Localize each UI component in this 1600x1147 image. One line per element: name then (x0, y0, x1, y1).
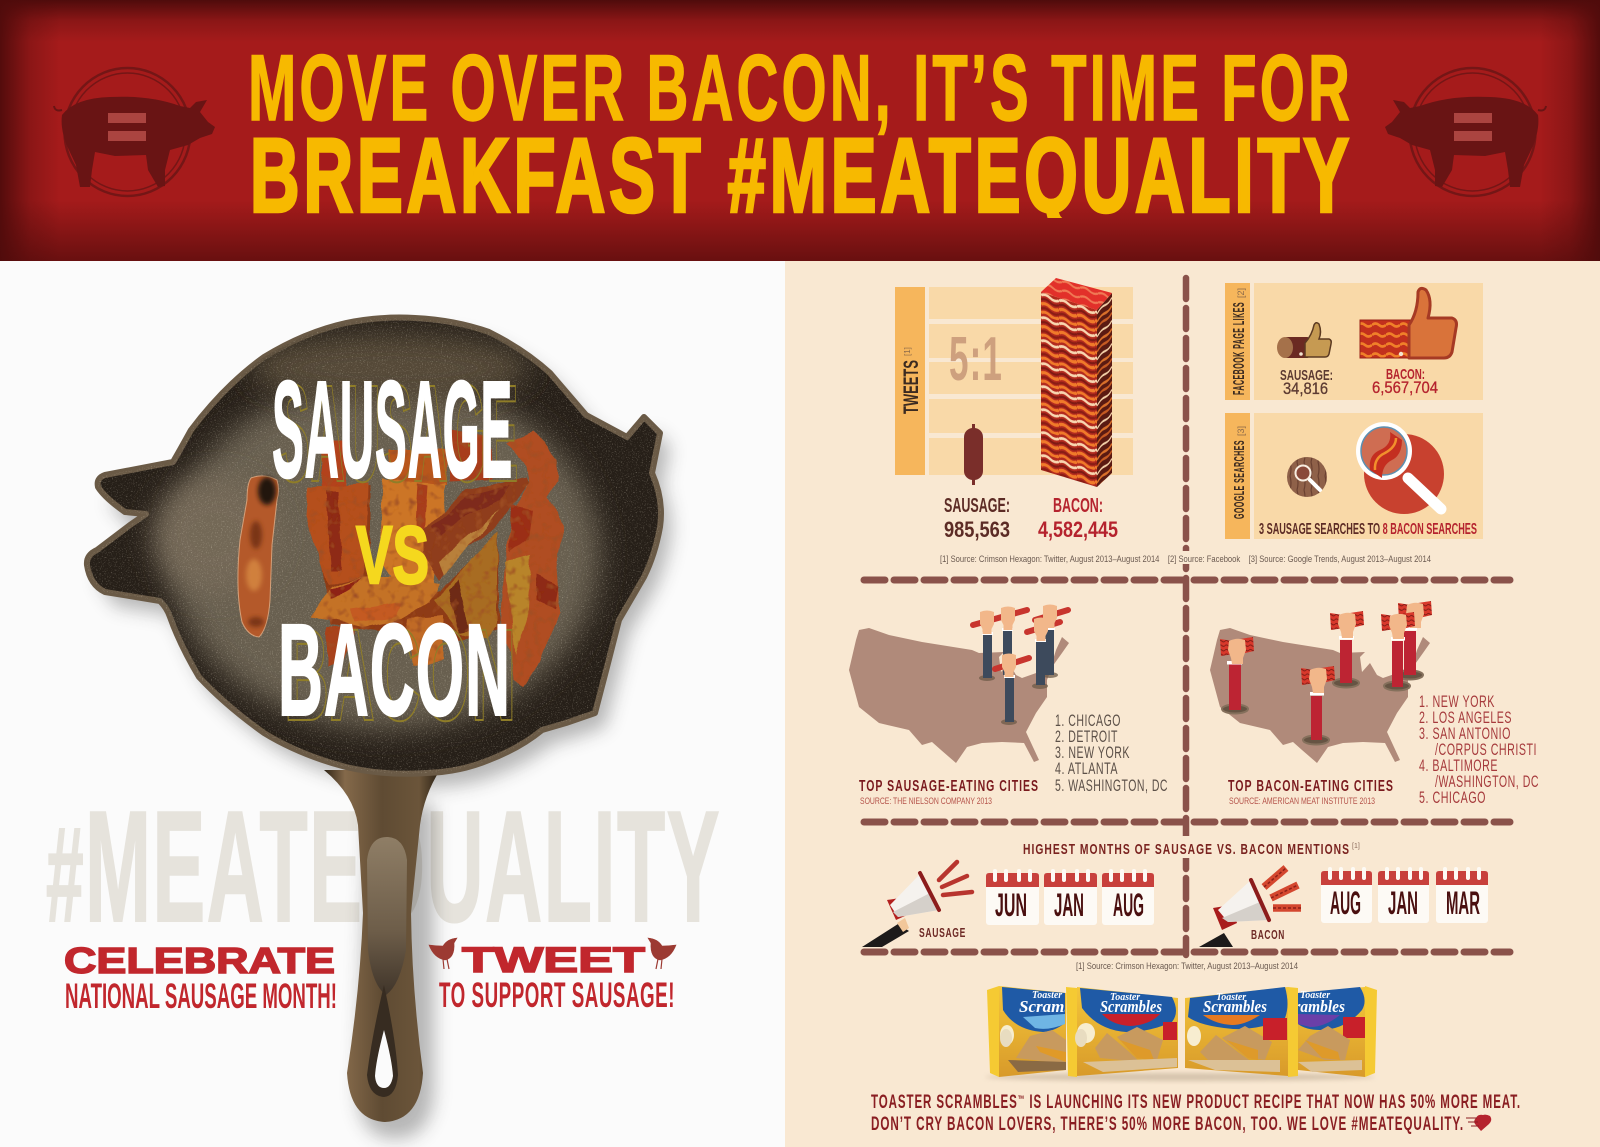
sausage likes: 34,816 (1283, 379, 1328, 398)
calendar: aug: AUG (1330, 885, 1361, 921)
icon: bacon thumb (1360, 288, 1456, 358)
icon: pig right (1385, 68, 1546, 196)
calendar: aug: AUG (1113, 887, 1144, 923)
skillet illustration: SAUSAGE (278, 357, 519, 511)
icon: sausage thumb (1277, 323, 1331, 358)
icon: heart (1466, 1115, 1491, 1131)
city list: 3. NEW YORK (1055, 744, 1130, 762)
skillet illustration: SAUSAGE (272, 353, 513, 507)
callout: celebrate (64, 940, 337, 1016)
searches comparison: 3 SAUSAGE SEARCHES TO 8 BACON SEARCHES (1259, 521, 1477, 538)
label: facebook (1231, 288, 1248, 395)
closing statement (871, 1092, 1521, 1135)
city list: 2. LOS ANGELES (1419, 709, 1512, 727)
watermark hashtag: #MEATEQUALITY (46, 779, 721, 955)
calendar: mar: MAR (1446, 885, 1480, 921)
bacon likes: BACON: (1386, 366, 1425, 383)
skillet illustration (80, 310, 671, 1139)
label: BACON (1251, 927, 1285, 942)
calendar: jan: JAN (1388, 885, 1418, 921)
label: google: [3] (1236, 426, 1246, 436)
box 1: Scrambles (1019, 997, 1092, 1016)
source note: [1] Source: Crimson Hexagon: Twitter, August 2013–August 2014 (1076, 961, 1298, 972)
city list: 4. ATLANTA (1055, 760, 1118, 778)
map: usa (1210, 628, 1430, 763)
bacon tweet count: 4,582,445 (1038, 517, 1118, 542)
closing statement: TOASTER SCRAMBLES (871, 1092, 1113, 1113)
closing statement: ™ (1018, 1094, 1025, 1106)
calendar: jan: JAN (1054, 887, 1084, 923)
box 4: Toaster (1300, 990, 1330, 1001)
heading: bacon (278, 596, 517, 748)
caption: SOURCE: THE NIELSON COMPANY 2013 (860, 796, 992, 807)
label: google (1231, 426, 1248, 519)
title (251, 54, 1350, 218)
caption: TOP SAUSAGE-EATING CITIES (859, 778, 1039, 795)
sausage link (238, 476, 278, 637)
skillet illustration: BACON (278, 596, 511, 743)
sausage tweet count: 985,563 (944, 517, 1010, 542)
ratio: 5:1 (949, 325, 1003, 394)
heading: sausage (272, 353, 519, 511)
calendar: jan (1378, 869, 1429, 923)
city list: 2. DETROIT (1055, 728, 1118, 746)
calendar: aug (1321, 869, 1372, 923)
panel: top sausage cities (849, 604, 1168, 807)
pan handle (324, 770, 440, 1122)
box 4: Scrambles (1279, 997, 1345, 1016)
calendar: jan (1044, 871, 1097, 925)
caption (859, 778, 1039, 807)
chart background bands (929, 287, 1133, 475)
icon: megaphone sausage (862, 862, 972, 947)
calendar: mar (1436, 869, 1488, 923)
icon: small magnifier (1287, 457, 1327, 497)
box 3: Scrambles (1203, 997, 1267, 1016)
sausage likes: SAUSAGE: (1280, 367, 1333, 384)
sausage tweet count (944, 495, 1010, 542)
label: facebook: [2] (1236, 288, 1246, 298)
box 4 (1298, 986, 1377, 1077)
city list: 5. CHICAGO (1419, 789, 1486, 807)
box 3 (1185, 987, 1298, 1077)
icon: megaphone bacon (1199, 868, 1301, 947)
city list: 5. WASHINGTON, DC (1055, 777, 1168, 795)
label: google: GOOGLE SEARCHES (1231, 440, 1248, 519)
label: facebook: FACEBOOK PAGE LIKES (1231, 302, 1248, 395)
icon: sausage bar (964, 424, 983, 485)
bacon strips (305, 430, 563, 687)
header banner (0, 0, 1600, 261)
bacon tweet count (1038, 495, 1118, 542)
city list: /CORPUS CHRISTI (1435, 741, 1537, 759)
icon: bacon stack bar (1041, 278, 1112, 487)
front arms (1301, 612, 1415, 740)
calendar: jun (986, 871, 1039, 925)
pan body (87, 318, 661, 774)
caption: TOP BACON-EATING CITIES (1228, 778, 1394, 795)
callout: celebrate: NATIONAL SAUSAGE MONTH! (65, 977, 337, 1016)
icon: bird right (648, 938, 676, 969)
sausage link vertical divider (1183, 278, 1189, 955)
callout: tweet: TO SUPPORT SAUSAGE! (439, 976, 675, 1015)
city list: /WASHINGTON, DC (1435, 773, 1539, 791)
box 1: Toaster (1032, 990, 1062, 1001)
arms holding sausages (973, 604, 1068, 725)
calendar: aug (1102, 871, 1154, 925)
heading: highest months: HIGHEST MONTHS OF SAUSAGE VS. BACON MENTIONS (1023, 841, 1350, 858)
sausage megaphone and months (862, 862, 1154, 947)
panel: top bacon cities (1210, 601, 1539, 807)
calendar: jun: JUN (995, 887, 1027, 923)
icon: bird left (429, 938, 457, 969)
pan floor (80, 310, 670, 780)
caption: SOURCE: AMERICAN MEAT INSTITUTE 2013 (1229, 796, 1375, 807)
bacon likes: 6,567,704 (1372, 378, 1438, 397)
city list (1419, 693, 1539, 807)
city list (1055, 712, 1168, 795)
box 3: Toaster (1216, 992, 1246, 1003)
box 2 (1066, 987, 1178, 1077)
callout: tweet (429, 938, 676, 1015)
city list: 3. SAN ANTONIO (1419, 725, 1511, 743)
label: SAUSAGE (919, 925, 966, 940)
sausage tweet count: SAUSAGE: (944, 495, 1010, 517)
map: usa (849, 628, 1069, 763)
skillet illustration: BACON (284, 601, 517, 748)
sausage link horizontal dividers (864, 580, 1510, 952)
icon: large magnifier (1356, 422, 1444, 514)
sausage likes (1280, 367, 1333, 398)
chart: tweets (895, 278, 1133, 542)
caption (1228, 778, 1394, 807)
bacon tweet count: BACON: (1053, 495, 1103, 517)
city list: 4. BALTIMORE (1419, 757, 1498, 775)
pan shadow (97, 332, 671, 1139)
callout: tweet: TWEET (462, 941, 645, 980)
panel: facebook page likes (1225, 283, 1483, 400)
bacon likes (1372, 366, 1438, 397)
icon: pig left (54, 68, 215, 196)
box shadow (985, 1073, 1375, 1081)
city list: 1. NEW YORK (1419, 693, 1495, 711)
city list: 1. CHICAGO (1055, 712, 1121, 730)
box 2: Toaster (1110, 992, 1140, 1003)
label: tweets: TWEETS (900, 360, 923, 414)
right panel background (785, 261, 1600, 1147)
left panel background (0, 261, 785, 1147)
sources note: [1] Source: Crimson Hexagon: Twitter, August 2013–August 2014 [2] Source: Facebook [3] Source: Google Trends, August 2013–August 2014 (940, 554, 1431, 565)
heading: highest months: [1] (1352, 843, 1360, 850)
callout: celebrate: CELEBRATE (64, 940, 335, 981)
panel: google searches (1225, 413, 1483, 539)
arms holding bacon (1220, 601, 1432, 744)
product boxes (985, 986, 1377, 1081)
box 2: Scrambles (1100, 997, 1162, 1016)
heading: vs: VS (356, 510, 429, 601)
bacon megaphone and months (1199, 868, 1488, 947)
box 1 (987, 986, 1066, 1077)
label: tweets: [1] (903, 347, 912, 356)
